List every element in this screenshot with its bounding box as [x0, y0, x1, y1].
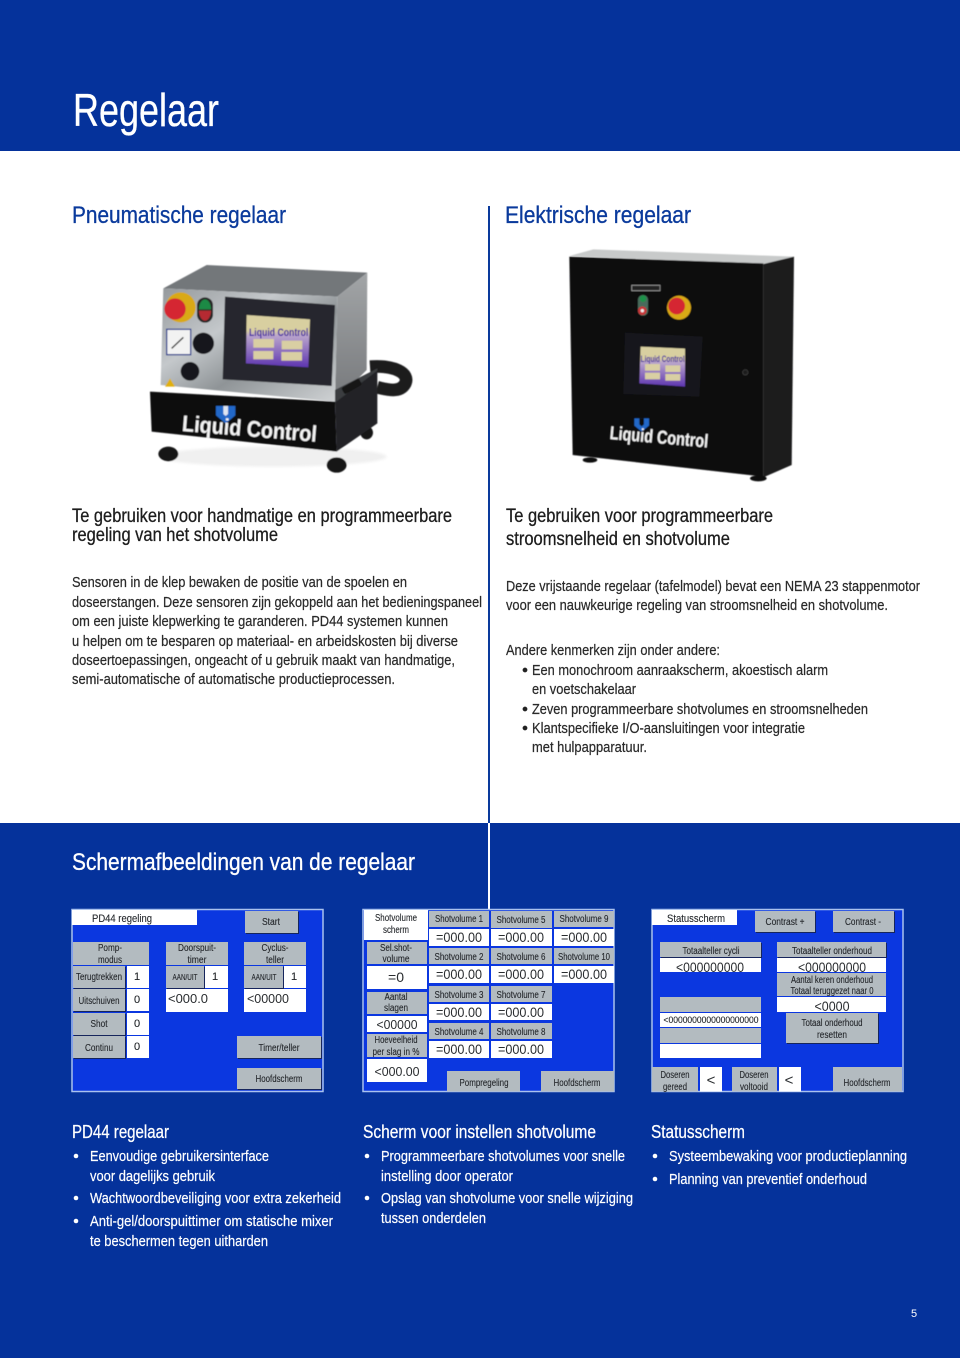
photo: pneumatic controller: Liquid Control	[249, 327, 308, 339]
subheading: pneumatic use: Te gebruiken voor handmatige en programmeerbare	[72, 506, 452, 527]
panel: status screen: Aantal keren onderhoud	[791, 975, 873, 986]
subheading: pneumatic use	[72, 506, 452, 546]
panel: PD44 screen	[72, 910, 323, 1092]
feature list: electric: Een monochroom aanraakscherm, akoestisch alarm	[532, 662, 828, 679]
heading: electric controller: Elektrische regelaar	[505, 202, 691, 229]
panel: status screen: <0000000000000000000	[664, 1015, 758, 1025]
panel: PD44 screen: <00000	[247, 991, 289, 1006]
panel: status screen: voltooid	[740, 1082, 768, 1093]
panel: PD44 screen: Hoofdscherm	[256, 1074, 302, 1085]
buttons	[166, 292, 196, 322]
panel: shot volume screen: scherm	[383, 925, 409, 936]
heading: screens: Schermafbeeldingen van de regelaar	[72, 849, 415, 876]
panel: status screen: Hoofdscherm	[844, 1078, 890, 1089]
text block: pneumatic description: semi-automatische of automatische productieprocessen.	[72, 671, 395, 688]
selector switch	[638, 295, 648, 316]
panel: PD44 screen: Continu	[85, 1043, 113, 1054]
text block: electric description	[506, 578, 920, 614]
panel: shot volume screen: Shotvolume 4	[434, 1027, 484, 1038]
panel: shot volume screen: <000.00	[374, 1064, 420, 1079]
panel: shot volume screen: per slag in %	[372, 1047, 420, 1058]
panel: shot volume screen: Sel.shot-	[380, 943, 412, 954]
panel: shot volume screen: =000.00	[498, 1041, 544, 1057]
column: Statusscherm: Systeembewaking voor productieplanning	[669, 1148, 907, 1165]
subheading: electric use: Te gebruiken voor programmeerbare	[506, 506, 773, 527]
panel: status screen: Statusscherm	[667, 913, 725, 925]
panel: PD44 screen: Doorspuit-	[178, 943, 216, 954]
panel: shot volume screen: =000.00	[498, 929, 544, 945]
center divider	[488, 206, 490, 910]
panel: PD44 screen: teller	[266, 955, 285, 966]
label plate	[632, 285, 660, 291]
panel: status screen: resetten	[817, 1030, 847, 1041]
brand	[634, 418, 649, 432]
text block: pneumatic description: Sensoren in de klep bewaken de positie van de spoelen en	[72, 574, 407, 591]
column: PD44 regelaar: Anti-gel/doorspuittimer om statische mixer	[90, 1213, 333, 1230]
text block: electric description: voor een nauwkeurige regeling van stroomsnelheid en shotvolume.	[506, 597, 888, 614]
panel: shot volume screen: Shotvolume 5	[496, 915, 546, 926]
panel: shot volume screen: Pompregeling	[460, 1078, 508, 1089]
column: Scherm voor instellen shotvolume: instelling door operator	[381, 1168, 513, 1185]
panel: PD44 screen: 1	[212, 971, 218, 983]
footer background panel	[0, 823, 960, 1358]
panel: status screen: Totaalteller cycli	[682, 946, 740, 957]
panel: shot volume screen: Aantal	[384, 992, 408, 1003]
text block: pneumatic description	[72, 574, 482, 688]
lock	[743, 370, 748, 375]
panel: status screen	[652, 910, 903, 1093]
column: PD44 regelaar: voor dagelijks gebruik	[90, 1168, 215, 1185]
panel: PD44 screen: 0	[134, 994, 140, 1006]
column: Statusscherm: Planning van preventief onderhoud	[669, 1171, 867, 1188]
panel: shot volume screen: Shotvolume 3	[434, 990, 484, 1001]
panel: shot volume screen: Hoofdscherm	[554, 1078, 600, 1089]
panel: status screen: <000000000	[676, 959, 744, 975]
column: Scherm voor instellen shotvolume: Scherm voor instellen shotvolume	[363, 1122, 596, 1142]
panel: PD44 screen: AAN/UIT	[172, 973, 198, 982]
feature list: electric	[506, 642, 868, 756]
panel: PD44 screen: Terugtrekken	[76, 972, 122, 983]
feature list: electric: en voetschakelaar	[532, 681, 636, 698]
panel: shot volume screen: Shotvolume 9	[560, 914, 609, 925]
panel: status screen: <	[785, 1072, 794, 1089]
panel: shot volume screen: Shotvolume 10	[558, 952, 610, 963]
panel: PD44 screen: Cyclus-	[262, 943, 288, 954]
column: PD44 regelaar: Eenvoudige gebruikersinterface	[90, 1148, 269, 1165]
photo: electric controller: Liquid Control	[609, 422, 709, 452]
feature list: electric: Klantspecifieke I/O-aansluitingen voor integratie	[532, 720, 805, 737]
panel: shot volume screen: slagen	[384, 1003, 408, 1014]
text block: pneumatic description: om een juiste klepwerking te garanderen. PD44 systemen kunnen	[72, 613, 448, 630]
column: Scherm voor instellen shotvolume: Programmeerbare shotvolumes voor snelle	[381, 1148, 625, 1165]
display bezel	[223, 297, 335, 386]
panel: status screen: Contrast +	[766, 917, 805, 928]
panel: PD44 screen: AAN/UIT	[252, 973, 277, 982]
text block: pneumatic description: doseerstangen. Deze sensoren zijn gekoppeld aan het bedieningspaneel	[72, 594, 482, 611]
panel: PD44 screen: 0	[134, 1018, 140, 1030]
panel: shot volume screen: =000.00	[561, 929, 607, 945]
panel: status screen: Totaal teruggezet naar 0	[790, 986, 874, 997]
panel: status screen: Totaal onderhoud	[802, 1018, 862, 1029]
column: PD44 regelaar: Wachtwoordbeveiliging voor extra zekerheid	[90, 1190, 341, 1207]
column: PD44 regelaar: PD44 regelaar	[72, 1122, 169, 1142]
panel: status screen: <000000000	[798, 959, 866, 975]
panel: status screen: Contrast -	[845, 917, 881, 928]
panel: status screen: <	[707, 1072, 716, 1089]
panel: PD44 screen: <000.0	[168, 991, 208, 1006]
text block: pneumatic description: doseertoepassingen, ongeacht of u gebruik maakt van handmatige,	[72, 652, 455, 669]
panel: shot volume screen: =000.00	[561, 966, 607, 982]
panel: status screen: Totaalteller onderhoud	[792, 946, 872, 957]
panel: shot volume screen: <00000	[376, 1017, 418, 1032]
panel: shot volume screen: Shotvolume	[375, 913, 417, 924]
panel: PD44 screen: 1	[291, 971, 297, 983]
panel: PD44 screen: Uitschuiven	[78, 996, 120, 1007]
panel: PD44 screen: Timer/teller	[258, 1043, 300, 1054]
panel: shot volume screen: Shotvolume 7	[496, 990, 546, 1001]
feature list: electric: met hulpapparatuur.	[532, 739, 647, 756]
panel: shot volume screen	[363, 910, 614, 1092]
photo: pneumatic controller	[150, 265, 406, 473]
header band	[0, 0, 960, 151]
panel: shot volume screen: =000.00	[436, 929, 482, 945]
column: PD44 regelaar: te beschermen tegen uitharden	[90, 1233, 268, 1250]
panel: shot volume screen: Shotvolume 6	[496, 952, 546, 963]
panel: PD44 screen: 1	[134, 971, 140, 983]
panel: shot volume screen: =0	[388, 969, 404, 985]
panel: shot volume screen: =000.00	[498, 1004, 544, 1020]
photo: electric controller	[569, 249, 794, 481]
brand	[216, 406, 235, 424]
panel: shot volume screen: =000.00	[436, 1041, 482, 1057]
panel: PD44 screen: modus	[98, 955, 122, 966]
panel: PD44 screen: Start	[262, 917, 280, 928]
column: Statusscherm: Statusscherm	[651, 1122, 745, 1142]
panel: PD44 screen: Pomp-	[98, 943, 122, 954]
column: Statusscherm	[651, 1122, 907, 1188]
panel: shot volume screen: Hoeveelheid	[374, 1035, 418, 1046]
panel: shot volume screen: Shotvolume 2	[434, 952, 484, 963]
column: PD44 regelaar	[72, 1122, 341, 1250]
panel: shot volume screen: Shotvolume 1	[435, 914, 483, 925]
column: Scherm voor instellen shotvolume: tussen onderdelen	[381, 1210, 486, 1227]
panel: status screen: Doseren	[660, 1070, 690, 1081]
photo: electric controller: Liquid Control	[641, 354, 685, 364]
heading: pneumatic controller: Pneumatische regelaar	[72, 202, 286, 229]
panel: shot volume screen: volume	[382, 954, 410, 965]
subheading: pneumatic use: regeling van het shotvolume	[72, 525, 278, 546]
photo: pneumatic controller: Liquid Control	[181, 410, 318, 447]
title: Regelaar	[73, 84, 219, 136]
panel: PD44 screen: Shot	[90, 1019, 108, 1030]
subheading: electric use: stroomsnelheid en shotvolume	[506, 529, 730, 550]
column: Scherm voor instellen shotvolume	[363, 1122, 633, 1227]
panel: PD44 screen: 0	[134, 1041, 140, 1053]
panel: shot volume screen: =000.00	[498, 966, 544, 982]
feature list: electric: Andere kenmerken zijn onder andere:	[506, 642, 720, 659]
panel: status screen: Doseren	[740, 1070, 768, 1081]
page number: 5	[911, 1308, 917, 1320]
panel: shot volume screen: Shotvolume 8	[496, 1027, 546, 1038]
panel: shot volume screen: =000.00	[436, 966, 482, 982]
panel: shot volume screen: =000.00	[436, 1004, 482, 1020]
feature list: electric: Zeven programmeerbare shotvolumes en stroomsnelheden	[532, 701, 868, 718]
emergency button	[667, 296, 691, 320]
panel: PD44 screen: PD44 regeling	[92, 913, 152, 925]
panel: status screen: gereed	[663, 1082, 687, 1093]
display recess	[623, 333, 703, 397]
panel: status screen: <0000	[814, 998, 850, 1014]
subheading: electric use	[506, 506, 773, 550]
column: Scherm voor instellen shotvolume: Opslag van shotvolume voor snelle wijziging	[381, 1190, 633, 1207]
text block: pneumatic description: u helpen om te besparen op materiaal- en arbeidskosten bij diverse	[72, 633, 458, 650]
panel: PD44 screen: timer	[188, 955, 207, 966]
